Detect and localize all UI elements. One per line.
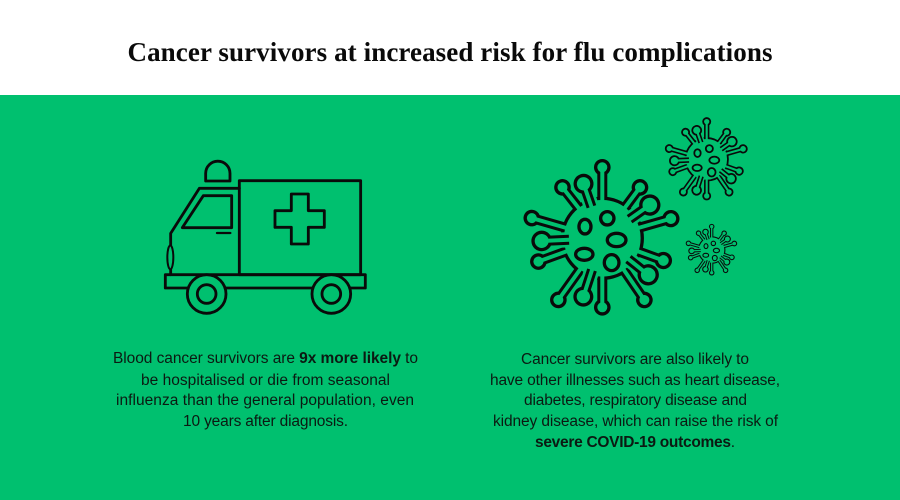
text block: other illnesses: kidney disease, which can raise the risk of [493,413,779,430]
text block: other illnesses: Cancer survivors are also likely to [521,351,749,368]
text block: blood cancer survivors: Blood cancer survivors are 9x more likely to [113,350,418,367]
icon: small virus [685,224,738,276]
text block: blood cancer survivors: be hospitalised or die from seasonal [141,372,390,389]
icon: ambulance [165,161,365,313]
text block: other illnesses: have other illnesses such as heart disease, [490,372,780,389]
text block: blood cancer survivors: influenza than the general population, even [116,392,414,409]
text block: other illnesses: severe COVID-19 outcomes. [535,434,735,451]
text block: blood cancer survivors: 10 years after diagnosis. [183,413,348,430]
text block: blood cancer survivors [113,350,418,430]
text block: other illnesses [490,351,780,451]
text block: other illnesses: diabetes, respiratory disease and [524,392,747,409]
icon: large virus [522,159,682,316]
icon: medium virus [664,117,749,200]
title: Cancer survivors at increased risk for flu complications [128,37,772,67]
